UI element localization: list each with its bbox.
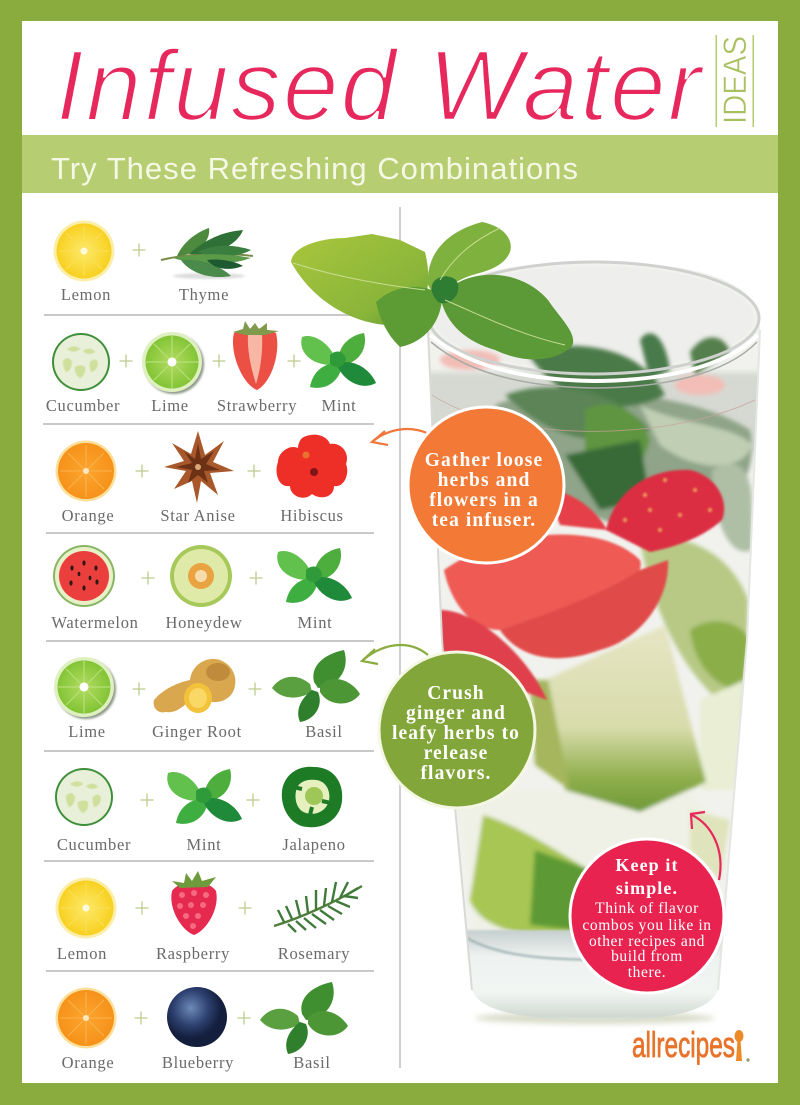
callout: keep it simple: combos you like in — [582, 917, 712, 934]
callout: keep it simple: simple. — [616, 878, 678, 898]
label: Rosemary — [278, 944, 350, 963]
mint sprig on rim — [291, 222, 573, 359]
honeydew chunks — [467, 540, 748, 932]
row 5: lime + ginger root + basil — [54, 650, 360, 741]
label: Thyme — [179, 285, 229, 304]
plus — [238, 902, 252, 914]
callout: keep it simple: Keep it — [615, 855, 679, 875]
plus — [140, 794, 154, 806]
plus — [212, 354, 226, 368]
icon: cucumber — [52, 333, 110, 391]
label: Lemon — [61, 285, 111, 304]
icon: lime — [54, 657, 116, 719]
label: Basil — [305, 722, 343, 741]
allrecipes logo: allrecipes — [632, 1024, 735, 1065]
label: Mint — [322, 396, 356, 415]
icon: mint — [167, 769, 242, 824]
row 6: cucumber + mint + jalapeno — [55, 767, 346, 854]
strawberry slices — [440, 470, 724, 700]
icon: basil — [260, 982, 348, 1054]
callout: tea infuser: herbs and — [438, 470, 530, 491]
plus — [250, 572, 262, 584]
callout: keep it simple: build from — [611, 948, 683, 965]
leaf tip — [432, 276, 458, 303]
base of glass — [455, 930, 735, 1019]
icon: watermelon — [53, 545, 115, 607]
label: Mint — [298, 613, 332, 632]
label: Lemon — [57, 944, 107, 963]
icon: mint — [277, 548, 352, 603]
callout: tea infuser — [408, 407, 564, 563]
plus — [238, 1012, 250, 1024]
callout: crush ginger: Crush — [427, 683, 485, 704]
plus — [136, 464, 148, 478]
plus — [132, 682, 146, 696]
callout: tea infuser: tea infuser. — [432, 510, 536, 531]
label: Cucumber — [46, 396, 120, 415]
large left leaf — [291, 234, 428, 325]
arrow: red — [691, 812, 720, 880]
back of glass — [434, 266, 754, 370]
label: Lime — [151, 396, 189, 415]
icon: lemon — [54, 220, 114, 282]
row 8: orange + blueberry + basil — [56, 982, 348, 1072]
row 2: cucumber + lime + strawberry + mint — [46, 321, 376, 415]
label: Strawberry — [217, 396, 297, 415]
icon: honeydew — [170, 545, 232, 607]
column divider — [399, 207, 401, 1068]
icon: star anise — [164, 431, 234, 503]
label: Lime — [68, 722, 106, 741]
callout: keep it simple: there. — [628, 964, 666, 981]
row 4: watermelon + honeydew + mint — [51, 545, 352, 632]
label: Jalapeno — [282, 835, 346, 854]
label: Mint — [187, 835, 221, 854]
label: Orange — [62, 506, 114, 525]
row 1: lemon + thyme — [54, 220, 253, 304]
plus — [134, 1012, 148, 1024]
callout: crush ginger — [379, 652, 535, 808]
label: Basil — [293, 1053, 331, 1072]
label: Honeydew — [165, 613, 243, 632]
plus — [248, 464, 260, 478]
callout: keep it simple — [570, 839, 724, 993]
icon: lime — [142, 332, 204, 394]
front right leaf — [440, 275, 573, 359]
icon: orange — [56, 988, 116, 1048]
small left leaf — [376, 287, 442, 347]
subtitle band: Try These Refreshing Combinations — [51, 151, 578, 186]
icon: rosemary — [274, 882, 362, 932]
label: Star Anise — [160, 506, 236, 525]
icon: blueberry — [167, 987, 227, 1047]
label: Hibiscus — [280, 506, 344, 525]
top leaf — [428, 222, 511, 298]
label: Watermelon — [51, 613, 139, 632]
callout: keep it simple: Think of flavor — [595, 900, 699, 917]
glass soft shadow — [475, 1012, 715, 1024]
icon: orange — [56, 440, 116, 502]
water top — [425, 372, 765, 452]
arrow: green — [362, 645, 428, 664]
spoon icon — [734, 1030, 744, 1061]
icon: raspberry — [171, 871, 217, 935]
submerged mint — [440, 333, 752, 552]
plus — [142, 572, 154, 584]
icon: cucumber — [55, 768, 113, 826]
callout: keep it simple: other recipes and — [589, 933, 705, 950]
plus — [248, 682, 262, 696]
label: Orange — [62, 1053, 114, 1072]
arrow: orange — [372, 429, 427, 445]
base lines — [468, 936, 583, 962]
callout: crush ginger: ginger and — [406, 703, 506, 724]
subtitle band — [22, 135, 778, 193]
plus — [136, 902, 148, 914]
veins — [293, 228, 565, 345]
period — [746, 1058, 750, 1062]
icon: basil — [272, 650, 360, 722]
callout: crush ginger: release — [424, 743, 488, 764]
plus — [246, 794, 260, 806]
callout: crush ginger: leafy herbs to — [392, 723, 520, 744]
glass rim — [428, 262, 760, 990]
callout: tea infuser: Gather loose — [425, 450, 543, 471]
icon: thyme — [161, 228, 253, 279]
row dividers — [43, 314, 374, 972]
icon: hibiscus — [276, 435, 347, 498]
icon: ginger root — [154, 659, 235, 713]
label: Raspberry — [156, 944, 230, 963]
glass of infused water — [420, 255, 765, 1025]
row 7: lemon + raspberry + rosemary — [56, 871, 362, 963]
row 3: orange + star anise + hibiscus — [56, 431, 347, 525]
plus — [132, 244, 146, 256]
plus — [120, 354, 132, 368]
icon: strawberry — [233, 321, 279, 390]
plus — [288, 354, 300, 368]
icon: lemon — [56, 878, 116, 938]
label: Cucumber — [57, 835, 131, 854]
icon: jalapeno — [282, 767, 342, 827]
label: Ginger Root — [152, 722, 242, 741]
callout: crush ginger: flavors. — [420, 763, 492, 784]
title: Infused Water — [56, 30, 705, 142]
label: Blueberry — [162, 1053, 234, 1072]
icon: mint — [301, 333, 376, 388]
callout: tea infuser: flowers in a — [429, 490, 539, 511]
ideas tag: IDEAS — [717, 36, 753, 124]
